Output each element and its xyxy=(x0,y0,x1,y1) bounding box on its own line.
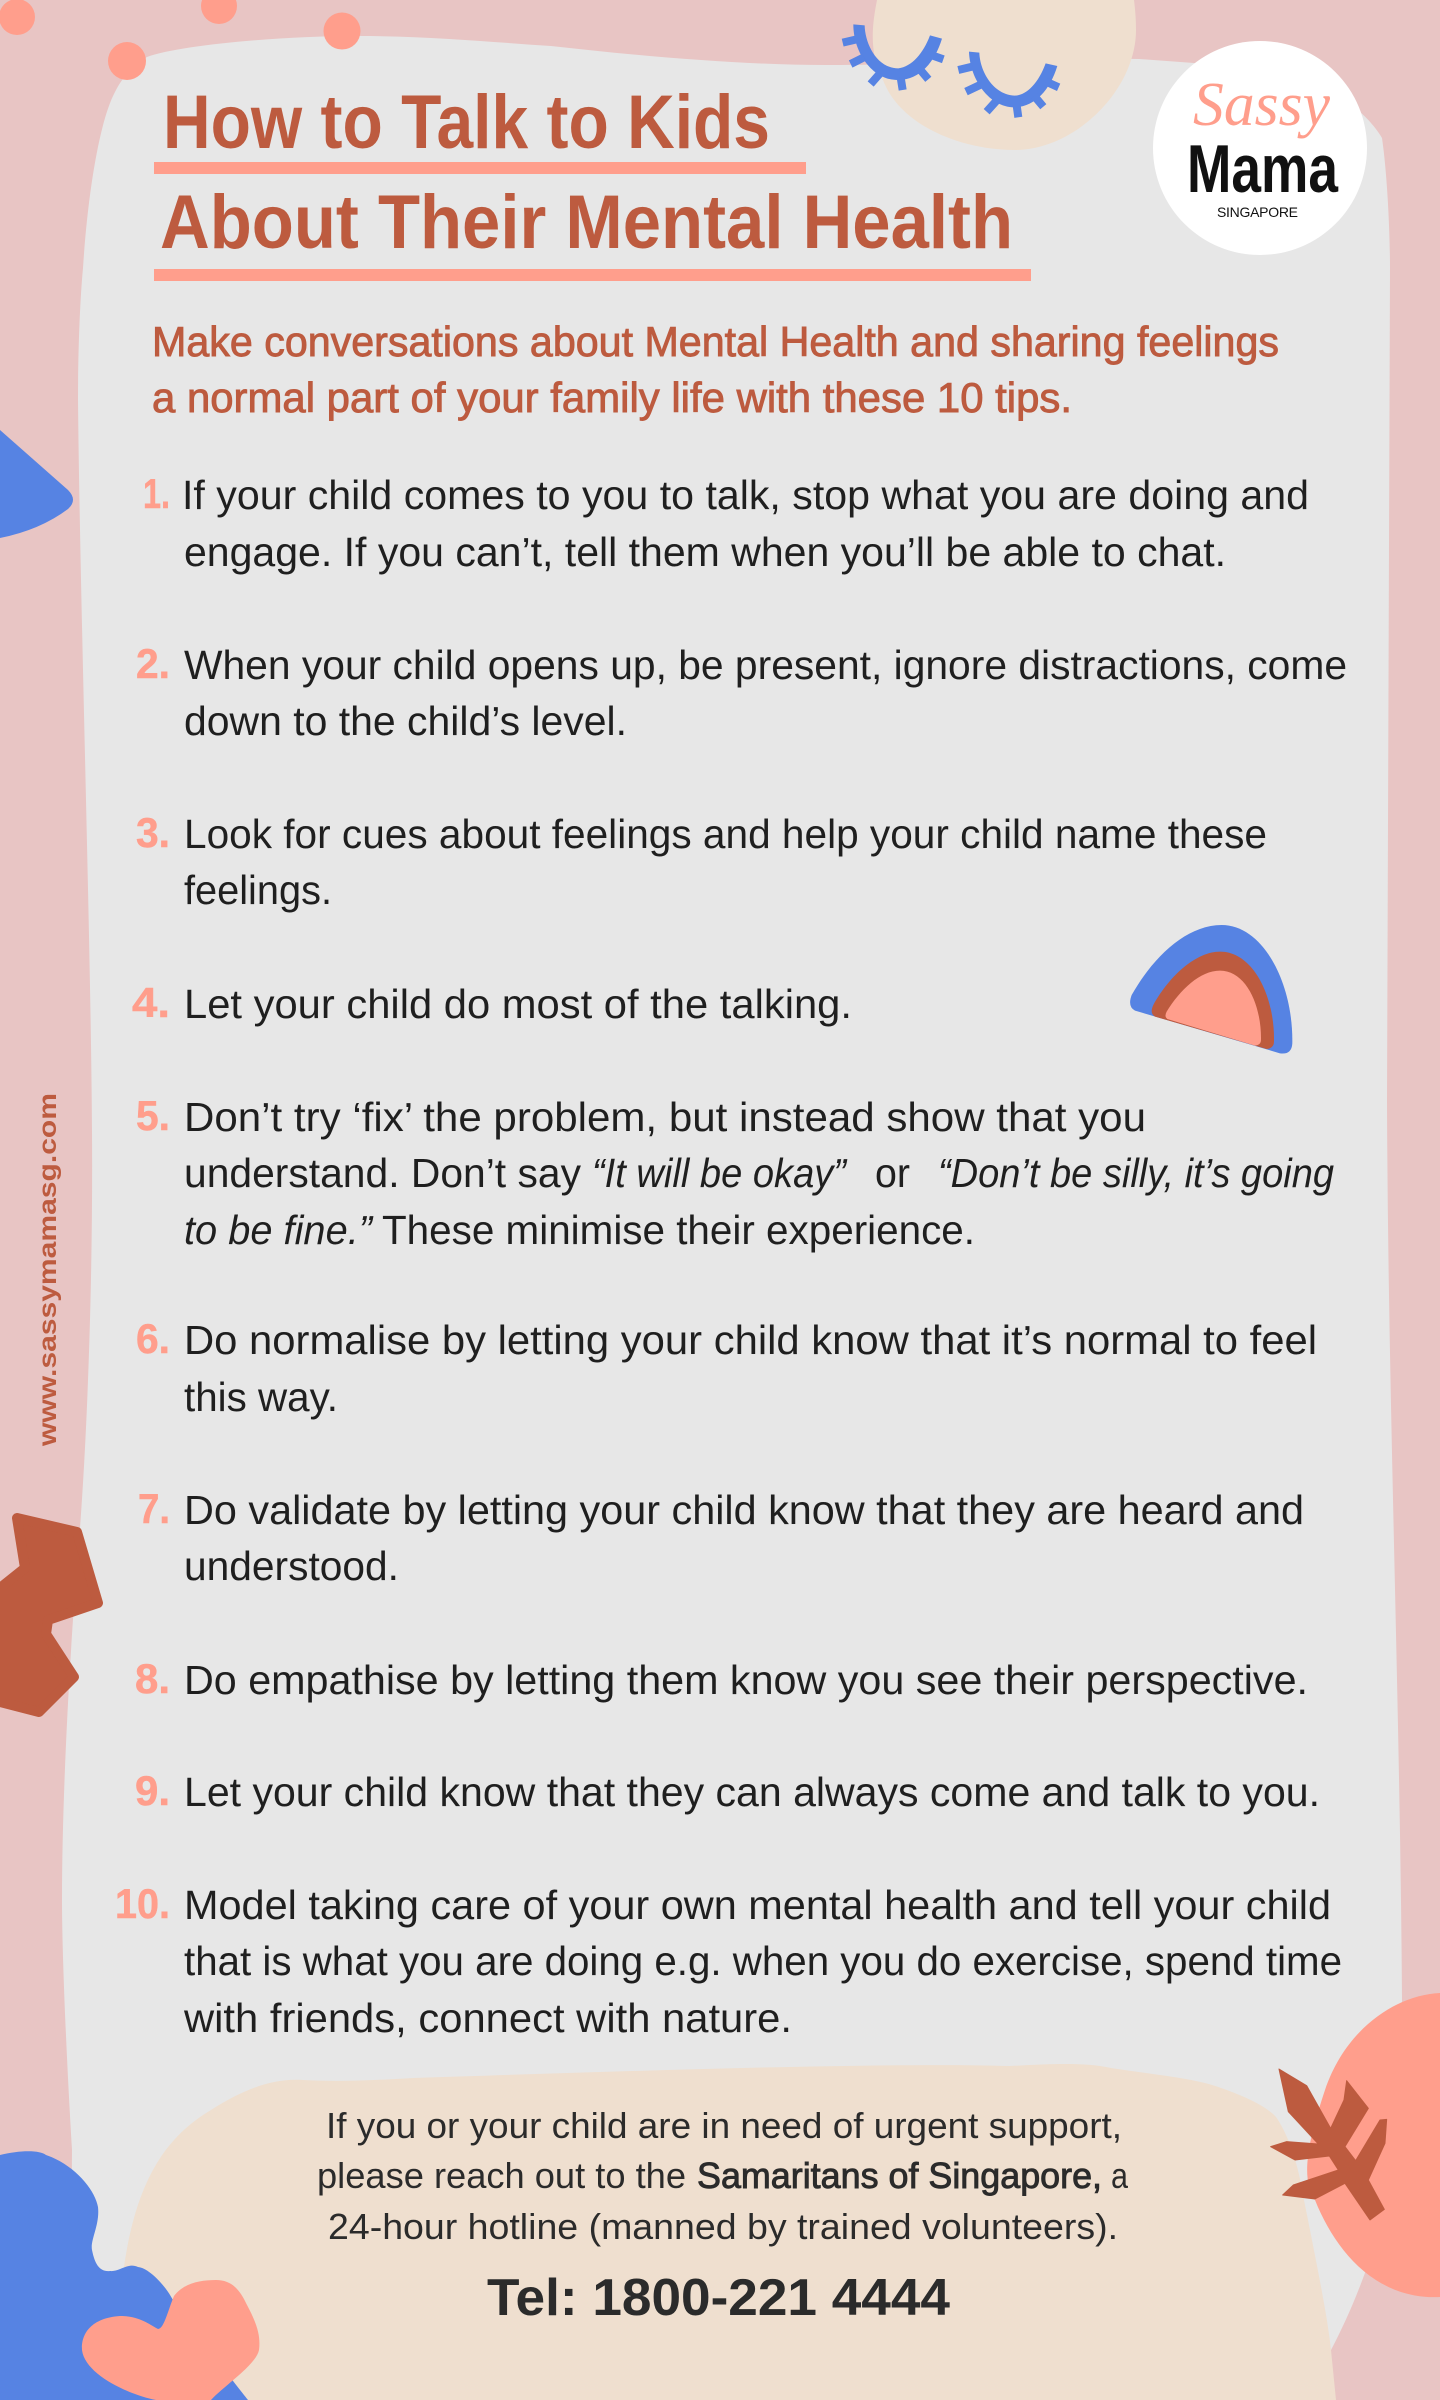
tip 5: Don’t try ‘fix’ the problem, but instead show that you xyxy=(184,1094,1146,1140)
website url: www.sassymamasg.com xyxy=(34,1093,62,1447)
tip 3: feelings. xyxy=(184,867,332,913)
title: About Their Mental Health xyxy=(160,180,1013,265)
blob: salmon heart xyxy=(82,2280,259,2400)
tip 5: understand. Don’t say xyxy=(184,1150,581,1196)
subtitle: Make conversations about Mental Health and sharing feelings xyxy=(152,318,1279,365)
support message xyxy=(317,2105,1129,2247)
title xyxy=(154,80,1031,281)
decorative dots xyxy=(0,0,360,80)
tip 5 xyxy=(136,1092,1334,1253)
tip 9: Let your child know that they can always come and talk to you. xyxy=(184,1769,1320,1815)
icon: right eye xyxy=(958,52,1059,117)
tip 6: this way. xyxy=(184,1374,338,1420)
tip 10: Model taking care of your own mental health and tell your child xyxy=(184,1882,1331,1928)
support message: If you or your child are in need of urgent support, xyxy=(326,2105,1122,2146)
tip 4: Let your child do most of the talking. xyxy=(184,981,852,1027)
tip 8: Do empathise by letting them know you see their perspective. xyxy=(184,1657,1308,1703)
tip 7: Do validate by letting your child know that they are heard and xyxy=(184,1487,1304,1533)
tip 2: down to the child’s level. xyxy=(184,698,627,744)
tip 5: or xyxy=(875,1150,910,1196)
tip 5: 5. xyxy=(136,1092,170,1139)
tip 4: 4. xyxy=(132,979,170,1026)
hotline number: Tel: 1800-221 4444 xyxy=(487,2269,950,2327)
tip 5: “Don’t be silly, it’s going xyxy=(938,1150,1334,1196)
tip 1: 1. xyxy=(143,470,170,517)
blob: blue bottom-left xyxy=(0,2151,248,2400)
support message: a xyxy=(1111,2155,1129,2196)
tip 1: engage. If you can’t, tell them when you’ll be able to chat. xyxy=(184,529,1226,575)
tip 7: understood. xyxy=(184,1543,399,1589)
tip 2: When your child opens up, be present, ignore distractions, come xyxy=(184,642,1347,688)
tip 2 xyxy=(136,640,1347,744)
tip 3: 3. xyxy=(136,809,170,856)
tip 3: Look for cues about feelings and help your child name these xyxy=(184,811,1267,857)
tip 1: If your child comes to you to talk, stop what you are doing and xyxy=(182,472,1309,518)
tip 10: with friends, connect with nature. xyxy=(183,1995,792,2041)
tip 2: 2. xyxy=(136,640,170,687)
icon: rust leaf xyxy=(1271,2069,1387,2220)
tip 3 xyxy=(136,809,1267,913)
support message: please reach out to the xyxy=(317,2155,686,2196)
tip 5: These minimise their experience. xyxy=(382,1207,975,1253)
panel: cream support box xyxy=(124,2064,1336,2400)
support message: 24-hour hotline (manned by trained volunteers). xyxy=(328,2206,1118,2247)
logo: Sassy Mama Singapore: Sassy xyxy=(1193,71,1330,139)
subtitle xyxy=(152,318,1279,421)
tip 7: 7. xyxy=(138,1485,170,1532)
logo: Sassy Mama Singapore: SINGAPORE xyxy=(1217,204,1298,220)
blob: salmon right xyxy=(1307,1993,1440,2297)
tip 6 xyxy=(136,1315,1317,1420)
support message: Samaritans of Singapore, xyxy=(697,2155,1102,2196)
tip 6: 6. xyxy=(136,1315,170,1362)
icon: left eye xyxy=(843,24,943,90)
tip 8: 8. xyxy=(135,1655,170,1702)
icon: rainbow xyxy=(1130,925,1292,1054)
icon: rust shape xyxy=(0,1518,98,1712)
tip 5: “It will be okay” xyxy=(592,1150,848,1196)
logo: Sassy Mama Singapore xyxy=(1153,41,1367,255)
tip 5: to be fine.” xyxy=(184,1207,374,1253)
tip 9: 9. xyxy=(135,1767,170,1814)
tip 10: 10. xyxy=(115,1880,170,1927)
tip 7 xyxy=(138,1485,1304,1589)
icon: closed eyes with lashes xyxy=(843,24,1059,117)
subtitle: a normal part of your family life with these 10 tips. xyxy=(152,374,1072,421)
tip 10: that is what you are doing e.g. when you do exercise, spend time xyxy=(184,1938,1342,1984)
tip 1 xyxy=(143,470,1309,575)
icon: blue triangle xyxy=(0,430,73,538)
title: How to Talk to Kids xyxy=(163,80,770,165)
tip 6: Do normalise by letting your child know that it’s normal to feel xyxy=(184,1317,1317,1363)
logo: Sassy Mama Singapore: Mama xyxy=(1187,131,1339,207)
cream blob top xyxy=(873,0,1136,150)
tip 10 xyxy=(115,1880,1342,2041)
